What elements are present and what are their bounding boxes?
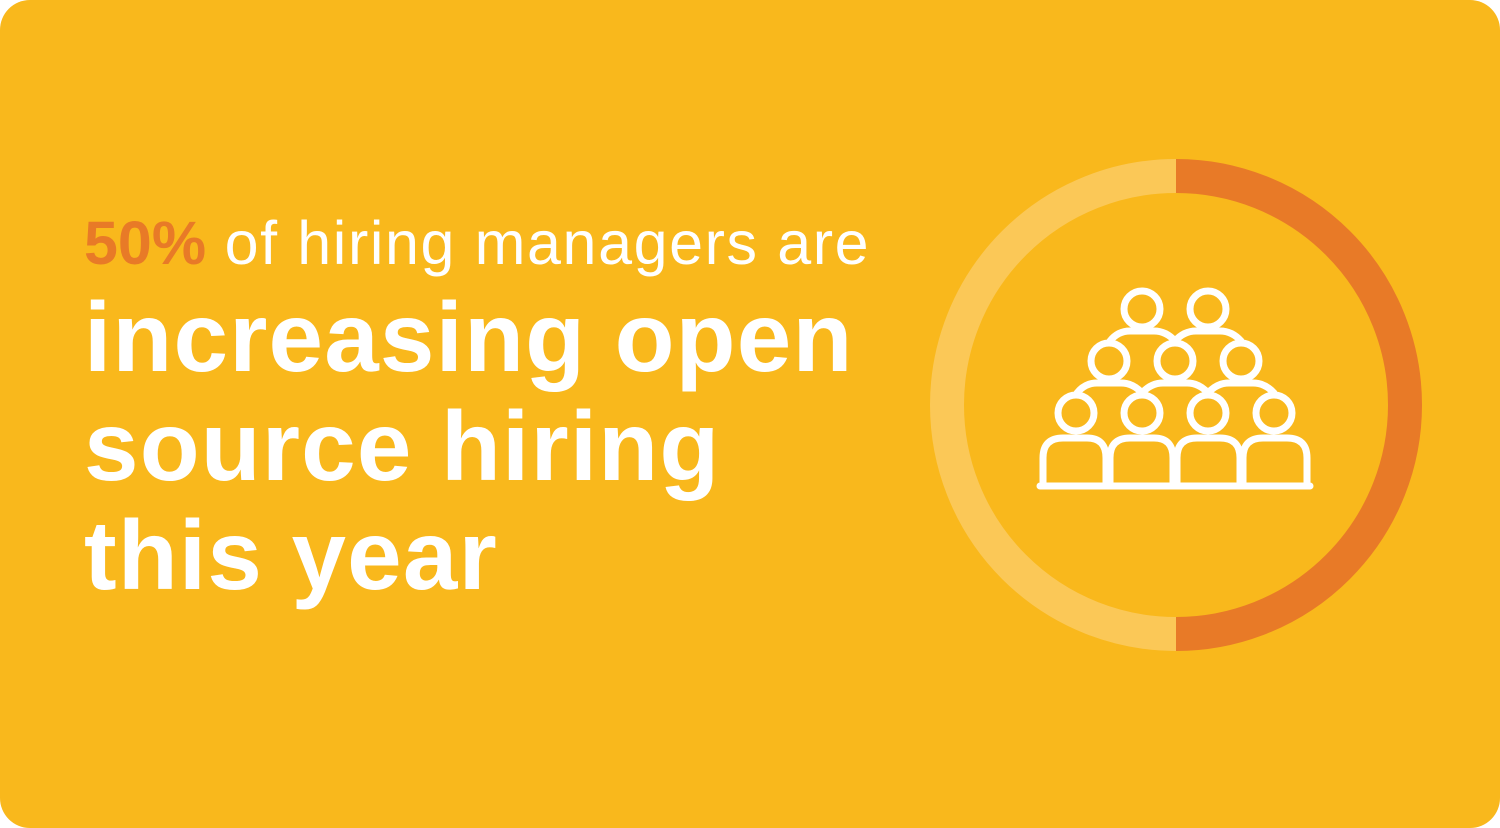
icon: group of people <box>1040 291 1310 486</box>
headline <box>84 282 854 610</box>
ring: 50% segment <box>1176 176 1405 634</box>
subtitle line: 50% of hiring managers are <box>84 209 870 277</box>
ring: remaining half <box>947 176 1176 634</box>
headline: source hiring <box>84 391 720 501</box>
headline: this year <box>84 500 498 610</box>
headline: increasing open <box>84 282 854 392</box>
